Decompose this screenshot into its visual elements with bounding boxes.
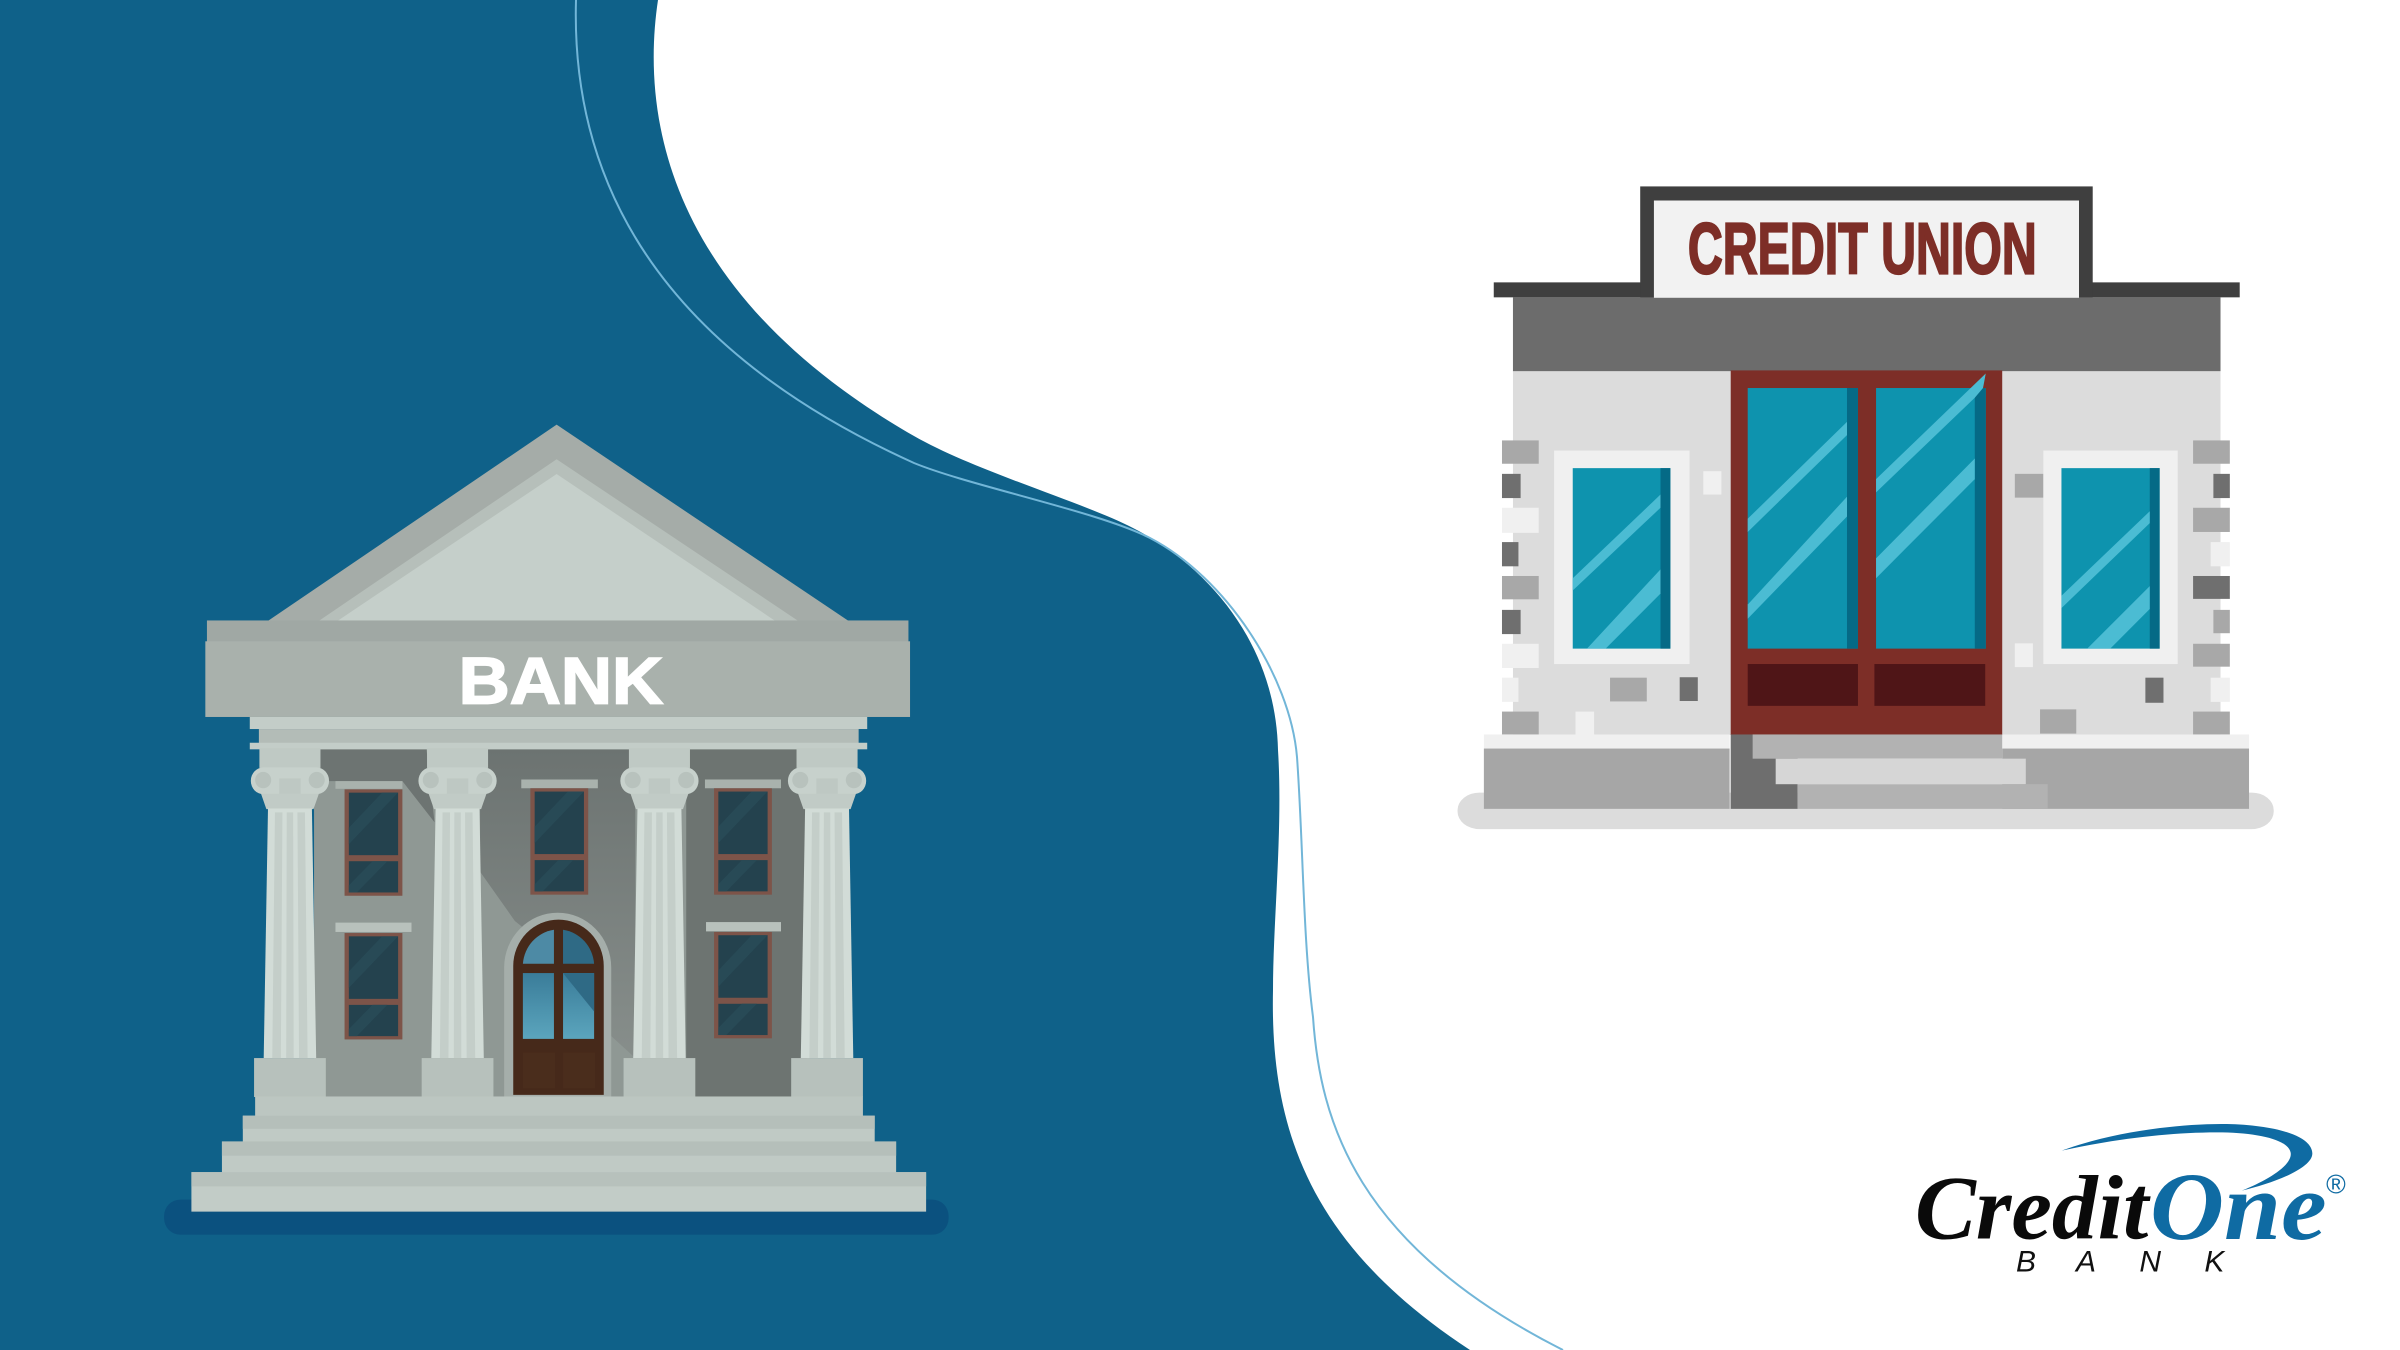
BANK label: BANK	[459, 644, 663, 717]
steps	[191, 1096, 926, 1212]
registered mark: ®	[2326, 1169, 2346, 1199]
wall	[314, 748, 809, 1097]
door arch surround	[504, 913, 611, 1096]
door	[513, 920, 604, 1095]
wall bricks	[1502, 440, 2230, 734]
foundation	[1484, 734, 2249, 809]
illustration: credit union building	[1458, 186, 2274, 829]
ground shadow	[164, 1200, 949, 1235]
sign	[1654, 200, 2079, 298]
thin wave line	[576, 0, 1563, 1350]
wordmark BANK: N	[2139, 1246, 2161, 1279]
pediment roof	[269, 425, 848, 620]
CREDIT UNION label: CREDIT UNION	[1688, 209, 2037, 290]
wordmark BANK: A	[2074, 1246, 2096, 1279]
windows	[345, 788, 772, 1039]
fascia and wall	[1513, 297, 2221, 735]
columns	[251, 748, 866, 1097]
left window	[1554, 451, 1690, 664]
window lintels	[335, 779, 781, 932]
double door	[1731, 370, 2002, 735]
blue wave panel	[0, 0, 1470, 1350]
wordmark BANK: B	[2016, 1246, 2036, 1279]
logo: Credit One Bank	[1915, 1124, 2346, 1279]
illustration: bank building	[164, 425, 949, 1235]
wordmark One: One	[2150, 1153, 2327, 1260]
roof and sign frame	[1494, 186, 2240, 297]
entrance steps	[1731, 734, 2048, 809]
ground shadow	[1458, 793, 2274, 829]
wordmark BANK: K	[2204, 1246, 2226, 1279]
right window	[2043, 451, 2178, 664]
entablature with BANK sign	[205, 620, 910, 749]
logo swoosh	[2062, 1124, 2312, 1191]
wordmark Credit: Credit	[1915, 1157, 2151, 1258]
